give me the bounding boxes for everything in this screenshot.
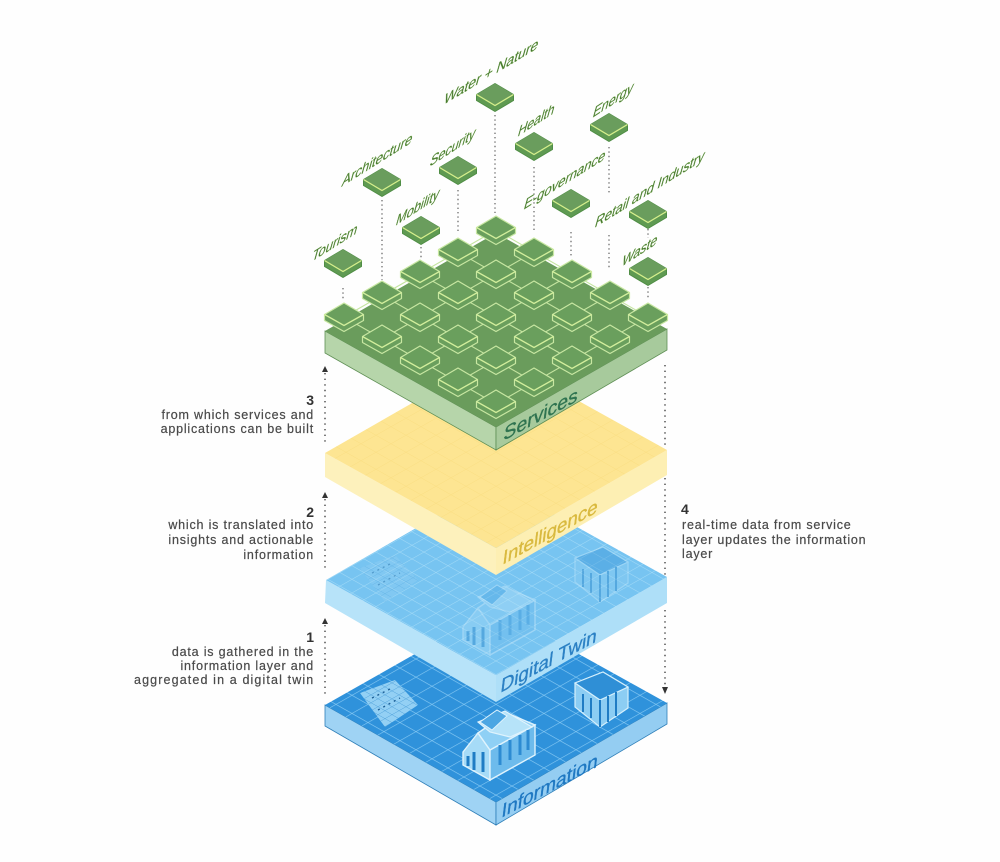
service: Architecture: Architecture (340, 128, 415, 191)
text: step 2: which is translated into (167, 518, 314, 532)
text: step 3: from which services and (162, 408, 314, 422)
text: step 4: layer (682, 547, 713, 561)
text: step 1: information layer and (180, 659, 314, 673)
service: Tourism (310, 219, 362, 278)
layer label: Digital Twin: Digital Twin (499, 624, 598, 698)
text: step 1: 1 (306, 629, 314, 645)
arrow: step 2 upward (322, 492, 328, 568)
service: Security: Security (428, 123, 478, 171)
layer: Information (325, 608, 667, 825)
service: Retail and Industry: Retail and Industry (593, 146, 707, 232)
service: Tourism: Tourism (310, 219, 360, 266)
layer: Intelligence (325, 355, 667, 575)
icon: faded twin buildings (360, 547, 628, 655)
text: step 1 (134, 629, 314, 687)
text: step 2: information (243, 548, 314, 562)
text: step 1: aggregated in a digital twin (134, 673, 314, 687)
service: Waste: Waste (620, 230, 660, 271)
service: Mobility: Mobility (394, 184, 442, 230)
layer label: Intelligence: Intelligence (501, 494, 599, 570)
layer label: Information: Information (500, 749, 599, 823)
floating service blocks and labels (310, 34, 707, 286)
service: Water + Nature: Water + Nature (442, 34, 541, 109)
service: E-governance: E-governance (522, 145, 608, 214)
text: step 3 (161, 392, 314, 436)
text: step 2: insights and actionable (168, 533, 314, 547)
service grid links (344, 230, 648, 404)
arrow: step 4 downward (662, 365, 668, 694)
text: step 2 (167, 504, 314, 562)
icon: city buildings (360, 672, 628, 780)
service: Energy (590, 78, 636, 142)
service: E-governance (522, 145, 608, 218)
service: Security (428, 123, 478, 184)
service: Health: Health (516, 99, 557, 141)
layer: Services (324, 216, 668, 450)
layer label: Services: Services (502, 383, 579, 446)
text: step 4 (681, 501, 866, 561)
text: step 3: 3 (306, 392, 314, 408)
arrow: step 3 upward (322, 366, 328, 445)
text: step 1: data is gathered in the (172, 645, 314, 659)
layer: Digital Twin (325, 482, 667, 702)
service: Mobility (394, 184, 442, 244)
text: step 4: real-time data from service (682, 518, 852, 532)
text: step 4: 4 (681, 501, 689, 517)
text: step 3: applications can be built (161, 422, 314, 436)
service: Waste (620, 230, 666, 286)
service blocks on the plate (324, 216, 668, 418)
text: step 4: layer updates the information (682, 533, 866, 547)
connector lines from floating services (343, 115, 648, 300)
text: step 2: 2 (306, 504, 314, 520)
service: Architecture (340, 128, 415, 196)
service: Energy: Energy (591, 78, 636, 122)
service: Health (516, 99, 557, 160)
arrow: step 1 upward (322, 618, 328, 695)
